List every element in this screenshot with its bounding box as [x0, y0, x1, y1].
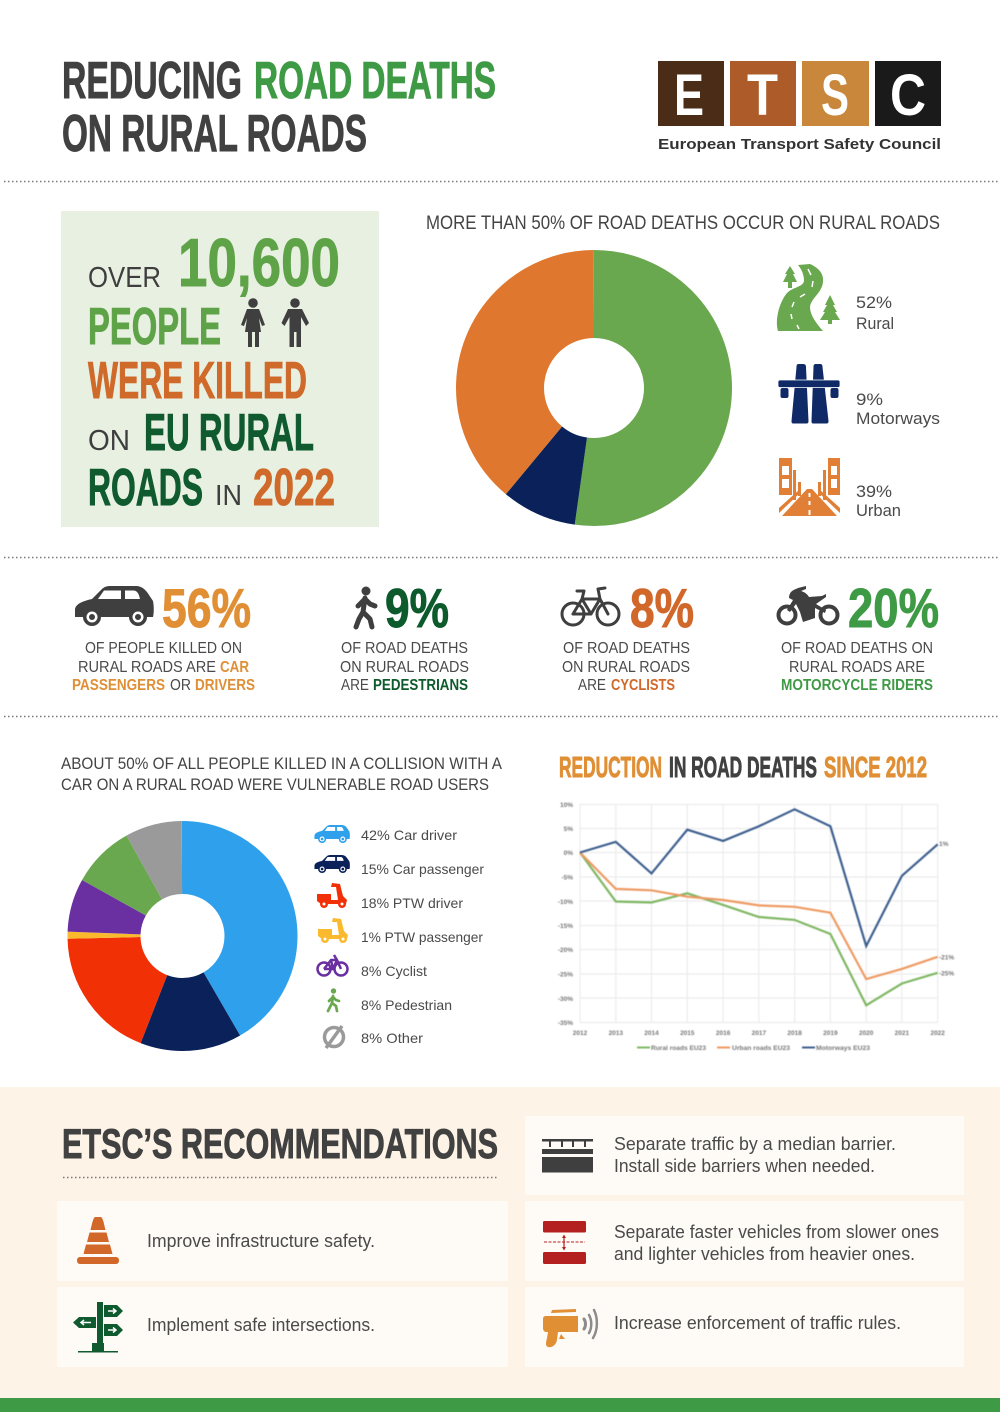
panel: over 10,600 people killed — [61, 211, 379, 527]
stat: car occupants 56%: OF PEOPLE KILLED ON — [85, 640, 242, 657]
legend: road types: Motorways — [856, 409, 940, 428]
icon: motorcycle — [778, 586, 838, 624]
axis labels: -21% — [939, 954, 954, 962]
icon: bicycle — [562, 588, 619, 625]
axis labels: 2018 — [787, 1030, 802, 1037]
stat: pedestrians 9%: ARE — [341, 677, 369, 694]
chart legend: Urban roads EU23 — [732, 1045, 790, 1052]
card: infrastructure safety: Improve infrastructure safety. — [147, 1231, 375, 1251]
line chart: reduction since 2012 — [558, 802, 954, 1052]
footer bar — [0, 1398, 1000, 1412]
stat: cyclists 8%: 8% — [630, 577, 694, 639]
heading: ETSC's recommendations: ETSC’S RECOMMENDATIONS — [62, 1120, 498, 1167]
card: enforcement — [525, 1287, 964, 1367]
title: ROAD DEATHS — [254, 52, 496, 110]
stat: car occupants 56%: PASSENGERS — [72, 677, 165, 694]
headline statement: ON — [88, 425, 130, 457]
headline statement: IN — [215, 480, 242, 512]
stat: pedestrians 9%: 9% — [385, 577, 449, 639]
heading: reduction in road deaths: REDUCTION — [559, 752, 662, 784]
stat: motorcycle riders 20%: OF ROAD DEATHS ON — [781, 640, 933, 657]
legend: road types: Rural — [856, 314, 894, 333]
legend: road types — [777, 264, 940, 520]
stat: cyclists 8%: CYCLISTS — [611, 677, 675, 694]
axis labels: 5% — [564, 826, 573, 833]
legend: victim types: 8% Other — [361, 1030, 423, 1046]
axis labels: -10% — [558, 899, 573, 906]
icon: cyclist — [318, 955, 348, 976]
card: safe intersections: Implement safe intersections. — [147, 1315, 375, 1335]
card: median barrier — [525, 1116, 964, 1195]
legend: victim types — [314, 825, 484, 1048]
stat: car occupants 56%: 56% — [162, 577, 251, 639]
headline statement: 10,600 — [178, 225, 340, 301]
axis labels: -15% — [558, 923, 573, 930]
axis labels: 1% — [939, 841, 949, 848]
stat: cyclists 8%: ARE — [578, 677, 606, 694]
legend: road types: 39% — [856, 482, 892, 501]
heading: vulnerable road users: CAR ON A RURAL ROAD WERE VULNERABLE ROAD USERS — [61, 776, 489, 794]
axis labels: -35% — [558, 1020, 573, 1027]
icon: woman and man — [241, 298, 309, 347]
chart legend: Rural roads EU23 — [651, 1045, 706, 1052]
icon: PTW driver — [317, 883, 347, 908]
legend: victim types: 1% PTW passenger — [361, 929, 483, 945]
legend: victim types: 18% PTW driver — [361, 895, 463, 911]
icon: pedestrian — [328, 988, 339, 1011]
axis labels: 2016 — [716, 1030, 731, 1037]
axis labels: 2015 — [680, 1030, 695, 1037]
icon: speed gun — [543, 1309, 597, 1347]
line: urban roads — [580, 852, 938, 979]
headline statement: OVER — [88, 262, 161, 294]
icon: car passenger — [314, 855, 350, 873]
axis labels: 0% — [564, 850, 573, 857]
axis labels: 10% — [560, 802, 573, 809]
icon: other — [324, 1026, 344, 1048]
axis labels: 2012 — [573, 1030, 588, 1037]
ETSC logo: E — [674, 63, 704, 128]
stat: pedestrians 9%: PEDESTRIANS — [373, 677, 468, 694]
axis labels: 2013 — [609, 1030, 623, 1037]
legend: road types: Urban — [856, 501, 901, 520]
stat: motorcycle riders 20%: RURAL ROADS ARE — [789, 659, 925, 676]
icon: car driver — [314, 825, 350, 843]
heading: reduction in road deaths — [559, 752, 927, 784]
axis labels: -5% — [561, 874, 573, 882]
axis labels: 2020 — [859, 1030, 874, 1037]
legend: victim types: 42% Car driver — [361, 827, 457, 843]
heading: reduction in road deaths: IN ROAD DEATHS — [669, 752, 817, 784]
headline statement: EU RURAL — [144, 404, 314, 462]
stat: pedestrians 9% — [340, 577, 469, 694]
stat: car occupants 56%: CAR — [220, 659, 249, 676]
axis labels: 2017 — [752, 1030, 767, 1037]
headline statement: 2022 — [253, 459, 335, 517]
icon: motorway — [778, 364, 840, 424]
card: infrastructure safety — [57, 1201, 508, 1281]
icon: signpost — [73, 1302, 123, 1352]
card: separate vehicles — [525, 1201, 964, 1281]
axis labels: 2022 — [930, 1030, 945, 1037]
axis labels: 2021 — [895, 1030, 910, 1037]
ETSC logo: T — [747, 63, 778, 128]
headline statement: PEOPLE — [88, 298, 221, 356]
chart legend: Motorways EU23 — [816, 1045, 870, 1052]
stat: cyclists 8%: OF ROAD DEATHS — [563, 640, 690, 657]
ETSC logo: C — [890, 63, 926, 128]
headline statement — [88, 225, 340, 517]
stat: cyclists 8%: ON RURAL ROADS — [562, 659, 690, 676]
ETSC logo: European Transport Safety Council — [658, 136, 941, 153]
icon: urban road — [779, 458, 840, 516]
title: ON RURAL ROADS — [62, 105, 367, 163]
panel: recommendations — [0, 1087, 1000, 1398]
stat: car occupants 56%: DRIVERS — [195, 677, 255, 694]
card: median barrier: Install side barriers when needed. — [614, 1156, 875, 1176]
stat: car occupants 56%: OR — [170, 677, 191, 694]
donut chart: road type — [500, 294, 688, 482]
stat: motorcycle riders 20%: MOTORCYCLE RIDERS — [781, 677, 933, 694]
icon: PTW passenger — [318, 918, 348, 943]
card: separate vehicles: Separate faster vehicles from slower ones — [614, 1222, 939, 1242]
title — [62, 52, 496, 163]
legend: victim types: 15% Car passenger — [361, 861, 484, 877]
headline statement: WERE KILLED — [88, 352, 307, 410]
icon: car — [75, 586, 154, 626]
stat: pedestrians 9%: ON RURAL ROADS — [340, 659, 469, 676]
card: median barrier: Separate traffic by a median barrier. — [614, 1134, 896, 1154]
icon: rural road — [777, 264, 840, 331]
card: separate vehicles: and lighter vehicles from heavier ones. — [614, 1244, 915, 1264]
heading: vulnerable road users: ABOUT 50% OF ALL PEOPLE KILLED IN A COLLISION WITH A — [61, 755, 502, 773]
ETSC logo — [658, 61, 941, 153]
stat: pedestrians 9%: OF ROAD DEATHS — [341, 640, 468, 657]
heading: vulnerable road users — [61, 755, 502, 794]
axis labels: 2014 — [644, 1030, 659, 1037]
title: REDUCING — [62, 52, 242, 110]
card: enforcement: Increase enforcement of traffic rules. — [614, 1313, 901, 1333]
line: rural roads — [580, 852, 938, 1005]
stat: cyclists 8% — [562, 577, 694, 694]
stat: motorcycle riders 20% — [778, 577, 939, 694]
legend: victim types: 8% Pedestrian — [361, 997, 452, 1013]
icon: traffic cone — [77, 1217, 119, 1264]
icon: lane separation — [543, 1221, 586, 1264]
card: safe intersections — [57, 1287, 508, 1367]
legend: road types: 9% — [856, 390, 883, 409]
ETSC logo: S — [821, 63, 849, 128]
icon: barrier — [542, 1139, 593, 1172]
stat: motorcycle riders 20%: 20% — [848, 577, 939, 639]
icon: pedestrian — [356, 586, 375, 627]
heading: more than 50%: MORE THAN 50% OF ROAD DEATHS OCCUR ON RURAL ROADS — [426, 213, 940, 234]
line: motorways — [580, 809, 938, 946]
headline statement: ROADS — [88, 459, 203, 517]
heading: reduction in road deaths: SINCE 2012 — [824, 752, 927, 784]
legend: road types: 52% — [856, 293, 892, 312]
axis labels: 2019 — [823, 1030, 838, 1037]
legend: victim types: 8% Cyclist — [361, 963, 427, 979]
axis labels: -30% — [558, 996, 573, 1003]
axis labels: -25% — [939, 970, 954, 978]
stat: car occupants 56% — [72, 577, 255, 694]
chart legend — [637, 1045, 870, 1052]
axis labels — [558, 802, 954, 1037]
axis labels: -20% — [558, 947, 573, 954]
axis labels: -25% — [558, 972, 573, 978]
donut chart: collision victims — [104, 858, 261, 1014]
stat: car occupants 56%: RURAL ROADS ARE — [78, 659, 216, 676]
